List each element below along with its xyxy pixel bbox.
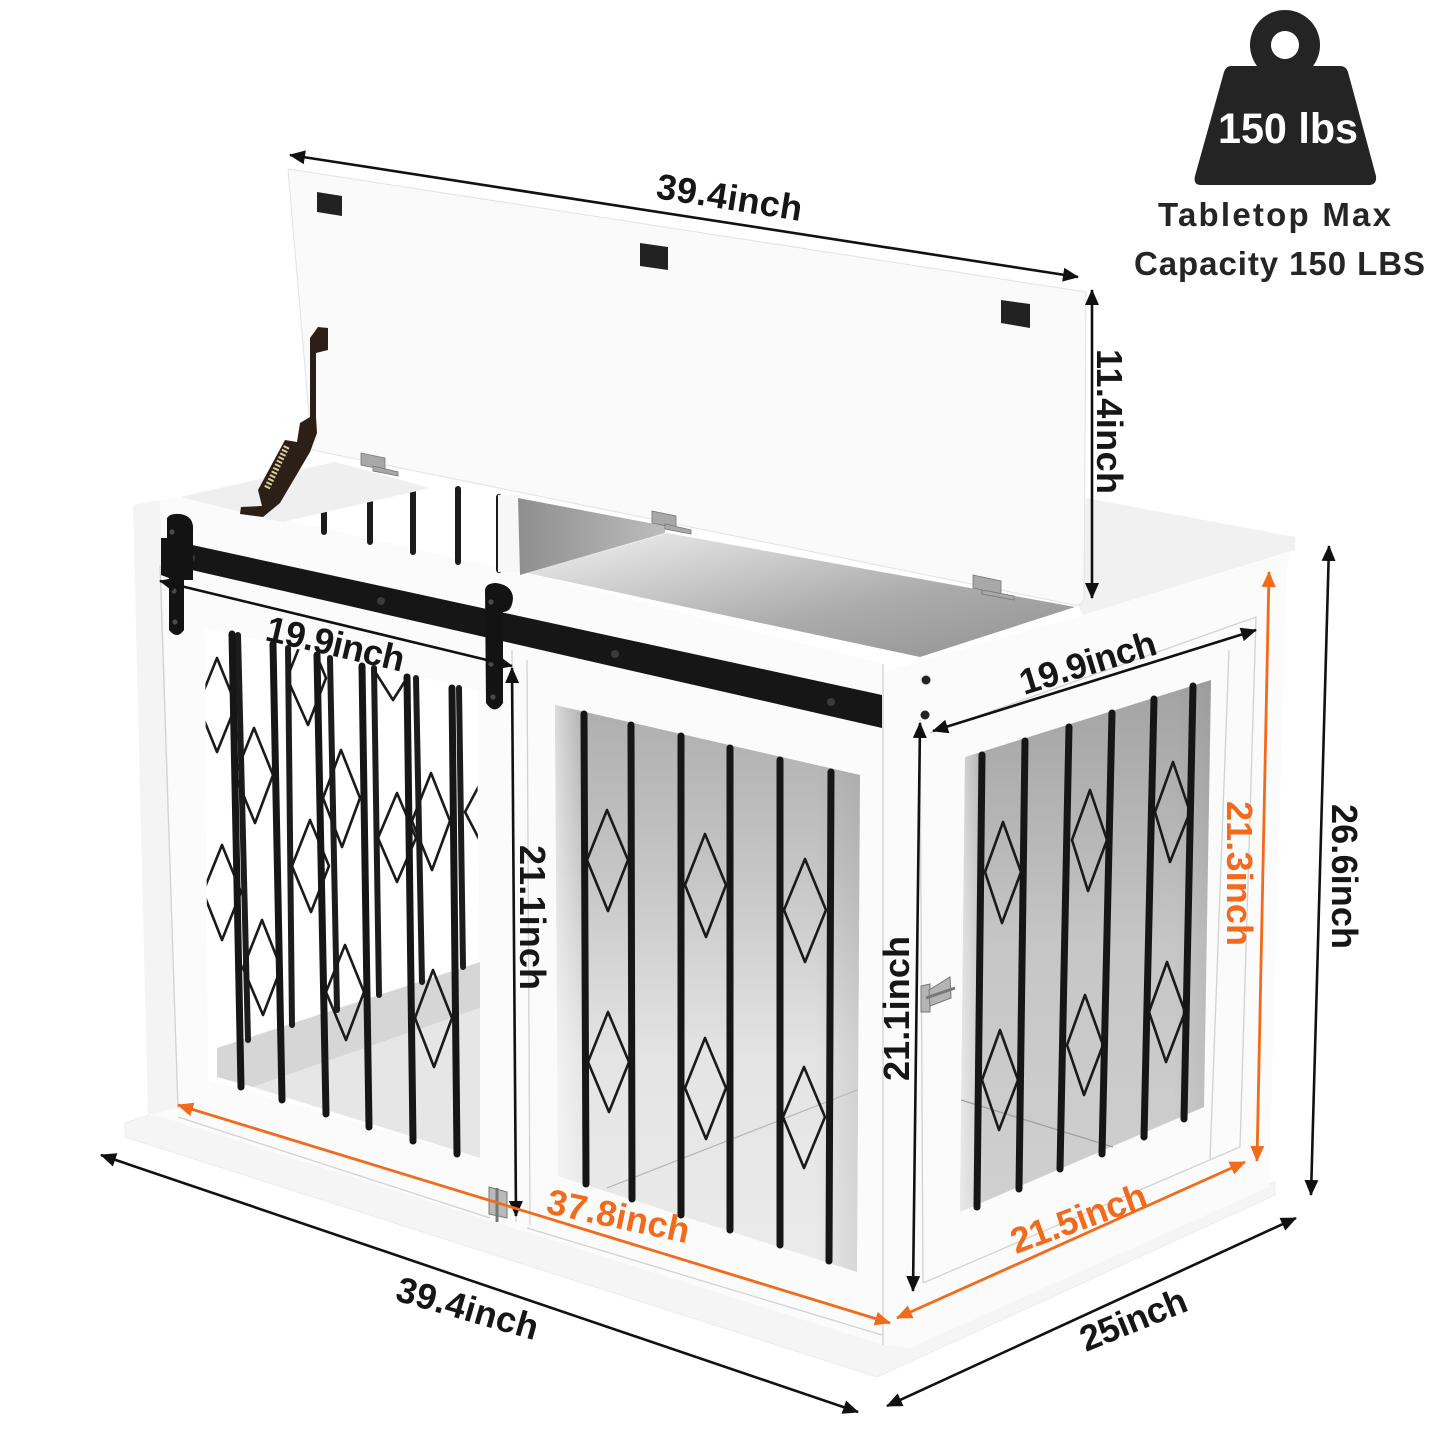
side panel: [883, 552, 1292, 1348]
dimension: total height: 26.6inch: [1324, 804, 1365, 949]
latch side door: [921, 977, 955, 1012]
dimension: overall width: [101, 1155, 858, 1412]
hanger strap: [161, 514, 193, 635]
dimension: side inner height: 21.3inch: [1219, 801, 1260, 946]
lid hinges: [361, 453, 1014, 600]
lid stay arm: [240, 327, 328, 517]
storage back wall: [518, 498, 665, 575]
front panel: [133, 497, 883, 1345]
bars: [977, 686, 1193, 1207]
hanger right: [485, 583, 513, 710]
diamonds: [982, 762, 1190, 1130]
floor crease: [961, 1100, 1113, 1147]
capacity text line 2: Capacity 150 LBS: [1134, 245, 1425, 282]
post screws: [920, 676, 930, 720]
dimension: side door width: 19.9inch: [1014, 622, 1161, 703]
dimension: lid depth: 11.4inch: [1089, 349, 1130, 494]
dimension: lid width: [290, 155, 1078, 277]
lid pads: [317, 192, 1030, 328]
left compartment ledge: [180, 462, 430, 522]
opening inner wall: [217, 962, 480, 1087]
left compartment back bars: [324, 489, 499, 570]
hanger bolts: [488, 599, 496, 700]
dimension: inner width: 37.8inch: [543, 1181, 694, 1251]
dimension: overall depth: 25inch: [1074, 1279, 1193, 1359]
dimension: front door height: [512, 668, 553, 1216]
rail screws: [187, 554, 835, 706]
diamonds: [587, 810, 826, 1168]
hanger strap: [485, 583, 513, 710]
opening side shading: [555, 705, 860, 1272]
dimension: lid width: 39.4inch: [654, 165, 805, 229]
storage well: [527, 533, 1075, 657]
arm and spring body: [240, 327, 328, 517]
diamond pattern left door: [205, 649, 478, 1068]
back bars: [238, 635, 463, 1040]
dimension: side door width: [933, 622, 1256, 731]
dimension lines: [101, 155, 1365, 1412]
left post tint: [133, 500, 178, 1115]
opening back: [960, 680, 1211, 1212]
divider column: [498, 495, 520, 572]
opening side shading: [960, 680, 1211, 1212]
dimension: side door height: 21.1inch: [876, 936, 917, 1081]
dimension: total height: [1311, 546, 1365, 1195]
barn door rail: [183, 543, 882, 728]
lid panel: [288, 169, 1086, 605]
spring coil: [267, 446, 287, 488]
side door opening: [960, 680, 1211, 1212]
capacity text line 1: Tabletop Max: [1158, 196, 1392, 233]
weight label: 150 lbs: [1218, 105, 1358, 153]
left post shadow edges: [160, 565, 882, 1335]
dimension: side door height: [876, 723, 920, 1291]
dimension: front door height: 21.1inch: [512, 845, 553, 990]
front bars: [232, 634, 457, 1154]
floor crease: [607, 1090, 857, 1188]
opening floor: [253, 1008, 480, 1158]
opening see-through: [205, 628, 480, 1158]
weight icon with capacity: [1134, 10, 1425, 282]
icon: weight body: [1195, 66, 1376, 185]
latch front door: [489, 1187, 507, 1222]
side door edges: [923, 617, 1256, 1283]
dimension: inner width: [178, 1105, 890, 1323]
lid: [240, 169, 1086, 605]
dimension: front door width: [160, 581, 512, 680]
back of left compartment: [285, 487, 518, 572]
hanger left: [161, 514, 193, 635]
right door opening: [555, 705, 860, 1272]
dimension: side inner height: [1219, 572, 1269, 1161]
icon: weight ring: [1250, 10, 1320, 80]
hanger bolts: [169, 529, 178, 625]
dimension: inner depth: 21.5inch: [1005, 1174, 1152, 1262]
tabletop right section: [1075, 498, 1295, 615]
dimension: front door width: 19.9inch: [262, 608, 409, 680]
left door opening: [205, 630, 480, 1158]
door and post edges: [512, 650, 923, 1345]
dimension: overall depth: [887, 1218, 1296, 1406]
dimension: inner depth: [897, 1162, 1245, 1318]
base plinth: [125, 1113, 1275, 1377]
dimension: overall width: 39.4inch: [392, 1268, 543, 1348]
crate cabinet: [125, 462, 1295, 1377]
bars: [584, 714, 831, 1261]
opening back: [555, 705, 860, 1272]
